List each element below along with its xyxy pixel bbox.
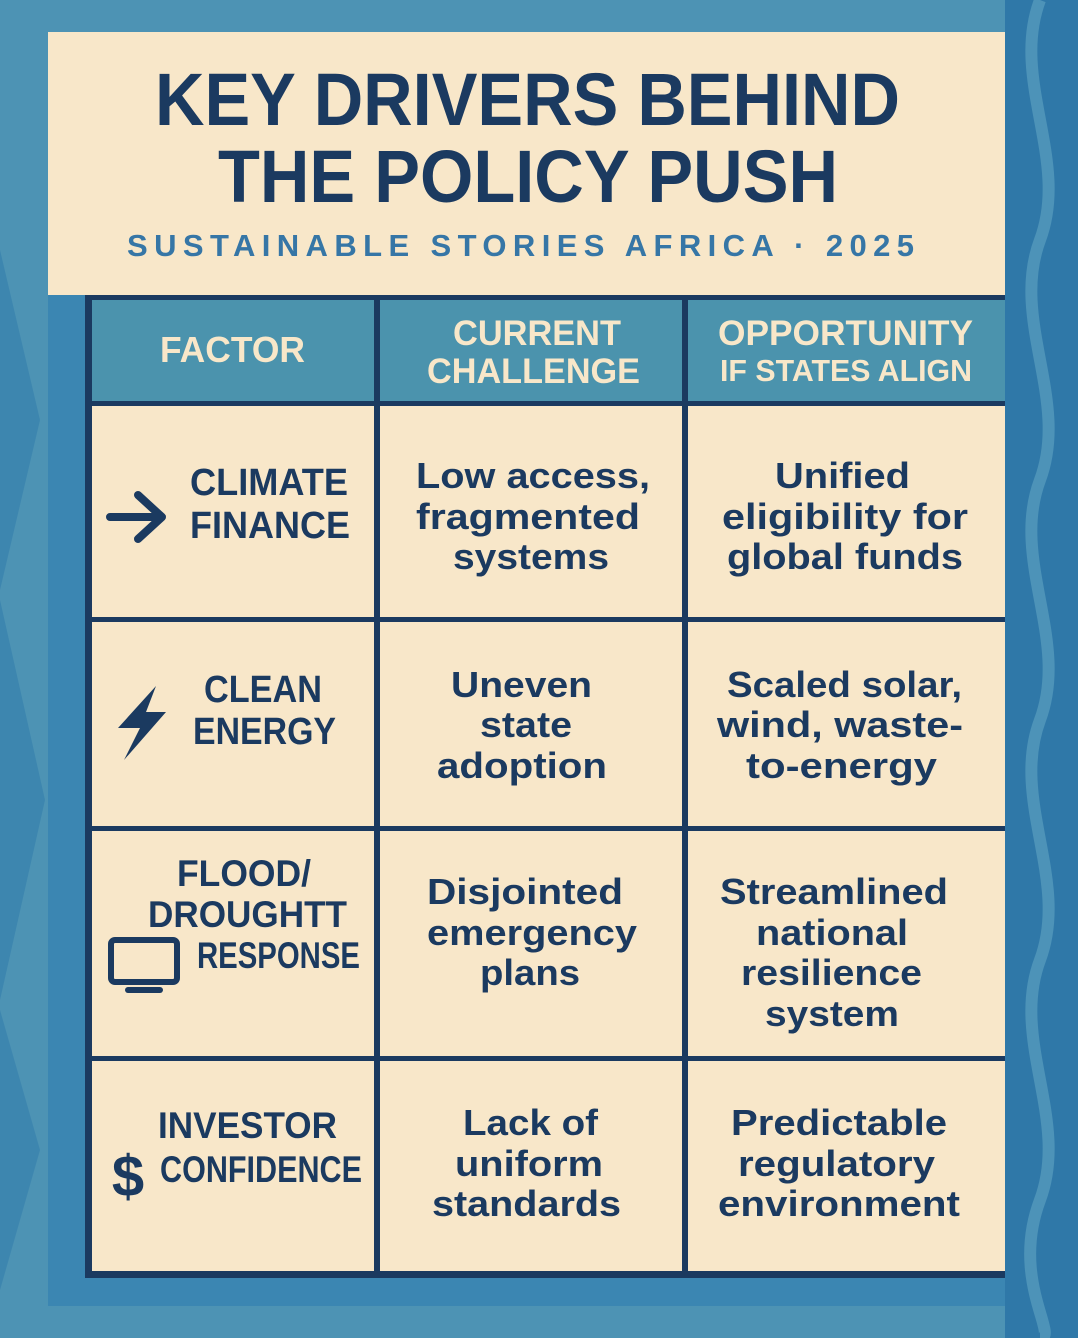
row: climate finance: fragmented (416, 496, 640, 537)
title panel (48, 32, 1005, 295)
row: climate finance: eligibility for (722, 496, 968, 537)
title: KEY DRIVERS BEHIND (155, 58, 900, 141)
row: clean energy: state (480, 704, 572, 745)
cells background (92, 406, 1005, 1271)
row: investor confidence (112, 1102, 960, 1224)
row: clean energy (118, 664, 963, 786)
header row (92, 300, 1005, 401)
row: climate finance: CLIMATE (190, 462, 348, 504)
row: clean energy: Scaled solar, (727, 664, 962, 705)
row: investor confidence: standards (432, 1183, 621, 1224)
row: flood/drought response: Disjointed (427, 871, 623, 912)
row: flood/drought response: DROUGHTT (148, 894, 347, 935)
table (85, 295, 1005, 1278)
row: investor confidence: Predictable (731, 1102, 947, 1143)
icon: arrow (110, 495, 162, 539)
row: climate finance: systems (453, 536, 609, 577)
row: investor confidence: environment (718, 1183, 960, 1224)
row: flood/drought response: plans (480, 952, 580, 993)
header row: CURRENT (453, 314, 621, 353)
header row: IF STATES ALIGN (720, 353, 972, 388)
row: investor confidence: regulatory (738, 1143, 935, 1184)
row: flood/drought response: system (765, 993, 899, 1034)
row: clean energy: to-energy (746, 745, 937, 786)
row: clean energy: wind, waste- (716, 704, 963, 745)
row: investor confidence: CONFIDENCE (160, 1149, 362, 1190)
subtitle: SUSTAINABLE STORIES AFRICA · 2025 (127, 228, 914, 263)
row: clean energy: CLEAN (204, 669, 322, 711)
decorative left diamonds (0, 250, 45, 1290)
row: clean energy: Uneven (451, 664, 592, 705)
row: climate finance: Unified (775, 455, 910, 496)
row: investor confidence: INVESTOR (158, 1105, 337, 1146)
row: flood/drought response: emergency (427, 912, 637, 953)
row: flood/drought response: national (756, 912, 908, 953)
row: clean energy: adoption (437, 745, 607, 786)
title (155, 58, 900, 218)
row: climate finance (110, 455, 968, 577)
header row: CHALLENGE (427, 352, 640, 391)
row: flood/drought response: Streamlined (720, 871, 948, 912)
decorative left pattern strip (48, 295, 88, 1305)
row: flood/drought response: RESPONSE (197, 935, 360, 976)
row: climate finance: FINANCE (190, 505, 350, 547)
icon: monitor (111, 940, 177, 993)
header row: OPPORTUNITY (718, 314, 973, 353)
row: flood/drought response: FLOOD/ (177, 853, 311, 894)
icon: lightning bolt (118, 686, 166, 760)
row: investor confidence: uniform (455, 1143, 603, 1184)
decorative right wave strip (1005, 0, 1078, 1338)
row: climate finance: Low access, (416, 455, 650, 496)
row: clean energy: ENERGY (193, 711, 336, 753)
row: flood/drought response: resilience (741, 952, 922, 993)
row: investor confidence: Lack of (463, 1102, 599, 1143)
row: climate finance: global funds (727, 536, 963, 577)
row: flood/drought response (111, 853, 948, 1034)
title: THE POLICY PUSH (218, 135, 838, 218)
header row: FACTOR (160, 329, 305, 370)
icon: dollar sign: $ (112, 1144, 144, 1209)
